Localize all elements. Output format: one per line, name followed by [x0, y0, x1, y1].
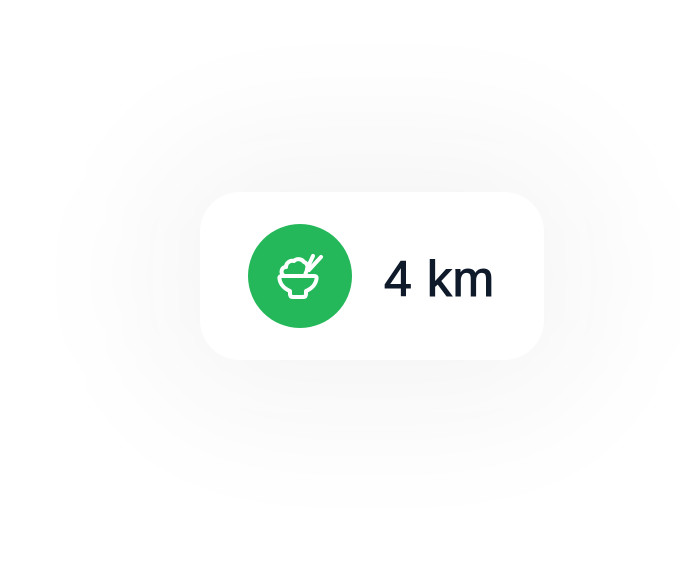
- panel: distance card: [200, 192, 544, 360]
- card shadow glow: [150, 140, 594, 412]
- distance value: 4 km: [384, 251, 495, 307]
- icon: rice bowl in green circle: [248, 224, 352, 328]
